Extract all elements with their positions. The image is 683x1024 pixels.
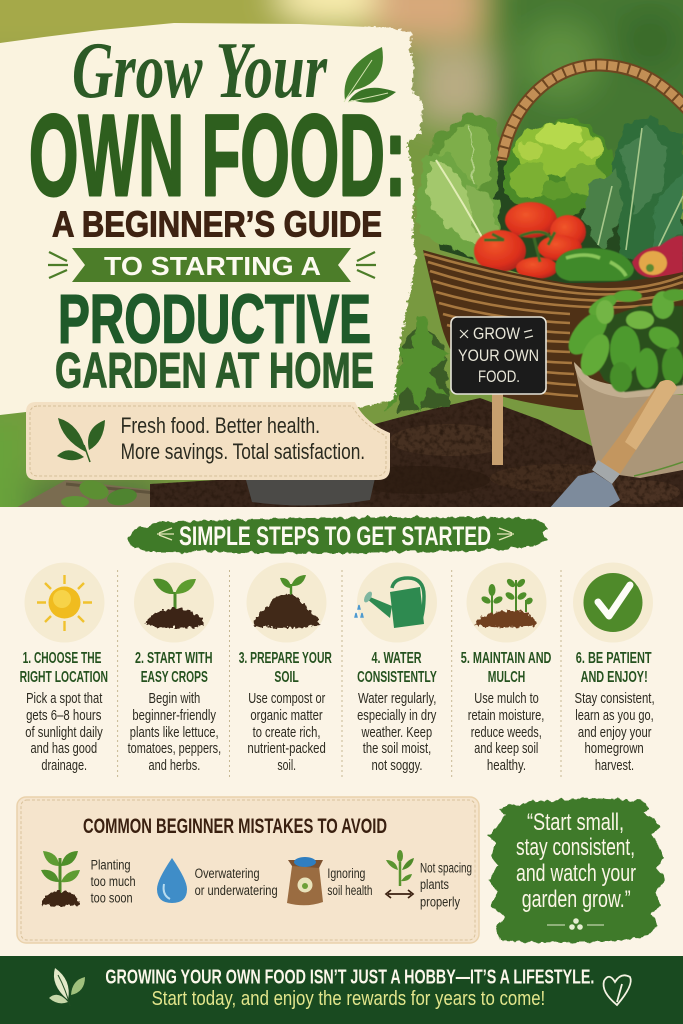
garden trowel	[548, 380, 683, 510]
icon: compost mound	[246, 562, 326, 642]
quote panel: and watch your	[516, 860, 636, 887]
quote panel: “Start small,	[527, 809, 624, 836]
step 3: prepare soil: Use compost or	[248, 691, 325, 707]
mistake: planting too much: too much	[91, 874, 136, 889]
step 1: choose location: RIGHT LOCATION	[20, 669, 108, 686]
ribbon: to starting a: TO STARTING A	[104, 251, 321, 281]
torn right edge	[330, 26, 423, 407]
mistake: ignoring soil: Ignoring	[327, 866, 365, 881]
lettuce: upper left leaf	[428, 112, 499, 200]
step 1: choose location: Pick a spot that	[26, 691, 102, 707]
step 5: maintain and mulch: and keep soil	[474, 741, 538, 757]
herb plant	[385, 318, 448, 412]
chalkboard sign	[451, 317, 546, 394]
red pepper	[632, 236, 683, 278]
title: a beginner's guide: A BEGINNER’S GUIDE	[52, 204, 382, 244]
step 5: maintain and mulch: retain moisture,	[468, 708, 544, 724]
icon: sprout	[41, 851, 80, 906]
green pepper	[555, 248, 634, 281]
icon: heart	[604, 975, 631, 1005]
step 1: choose location: and has good	[30, 741, 97, 757]
icon: watering can	[355, 562, 437, 642]
mistake: not spacing: Not spacing	[420, 861, 472, 876]
step 6: be patient: homegrown	[584, 741, 644, 757]
step 2: easy crops: plants like lettuce,	[130, 725, 219, 741]
icon: footer leaves	[49, 968, 85, 1006]
quote panel: stay consistent,	[516, 834, 635, 861]
step 4: water consistently: the soil moist,	[363, 741, 431, 757]
icon: soil bag	[287, 857, 323, 905]
step 2: easy crops: beginner-friendly	[132, 708, 217, 724]
mistake: overwatering	[195, 866, 278, 898]
step 3: prepare soil: nutrient-packed	[247, 741, 326, 757]
callout: benefits: Fresh food. Better health.	[121, 413, 320, 438]
step 4: water consistently: not soggy.	[372, 758, 422, 774]
cream torn title panel	[0, 23, 423, 415]
step 6: be patient: learn as you go,	[575, 708, 654, 724]
dark planter rim	[246, 480, 374, 506]
icon: water drop	[157, 858, 187, 903]
icon: plant spacing	[386, 850, 414, 898]
callout: benefits: More savings. Total satisfaction.	[121, 439, 365, 464]
step 5: maintain and mulch	[461, 562, 551, 774]
step 6: be patient: 6. BE PATIENT	[576, 650, 652, 667]
step 3: prepare soil: organic matter	[250, 708, 323, 724]
chalkboard sign: FOOD.	[478, 367, 520, 386]
icon: callout leaves	[57, 418, 105, 462]
panel: common mistakes	[17, 797, 479, 943]
tomatoes	[474, 202, 586, 279]
step 4: water consistently: 4. WATER	[372, 650, 422, 667]
step 1: choose location: gets 6–8 hours	[26, 708, 101, 724]
step 1: choose location: of sunlight daily	[25, 725, 103, 741]
mistake: not spacing: properly	[420, 895, 460, 910]
step 2: easy crops: and herbs.	[148, 758, 200, 774]
icon: title leaves	[344, 47, 396, 103]
ornament	[547, 918, 604, 930]
ribbon: to starting a	[48, 248, 376, 282]
step 3: prepare soil: soil.	[277, 758, 296, 774]
icon: check badge	[573, 562, 653, 642]
mistake: ignoring soil: soil health	[327, 883, 372, 898]
step 2: easy crops: 2. START WITH	[135, 650, 212, 667]
mistakes heading: COMMON BEGINNER MISTAKES TO AVOID	[83, 815, 387, 838]
step 6: be patient: Stay consistent,	[574, 691, 655, 707]
step 5: maintain and mulch: MULCH	[488, 669, 525, 686]
mistake: ignoring soil	[327, 866, 372, 898]
icon: mulched seedlings	[466, 562, 546, 642]
quote panel: garden grow.”	[522, 886, 631, 913]
kale veins	[598, 128, 683, 252]
hero photo: garden scene	[0, 0, 683, 560]
basil plant	[561, 289, 683, 392]
step 4: water consistently: especially in dry	[357, 708, 437, 724]
mistake: overwatering: Overwatering	[195, 866, 260, 881]
terracotta pot	[574, 362, 683, 478]
step 3: prepare soil: 3. PREPARE YOUR	[239, 650, 332, 667]
section banner: simple steps: SIMPLE STEPS TO GET STARTED	[179, 521, 491, 551]
step 2: easy crops: tomatoes, peppers,	[128, 741, 221, 757]
quote panel	[488, 798, 666, 943]
step 6: be patient: harvest.	[595, 758, 634, 774]
mistake: not spacing: plants	[420, 877, 449, 892]
step 5: maintain and mulch: healthy.	[487, 758, 526, 774]
wooden stake	[492, 393, 503, 465]
step 6: be patient: AND ENJOY!	[581, 669, 648, 686]
step 4: water consistently: Water regularly,	[358, 691, 436, 707]
section banner: simple steps	[127, 517, 548, 553]
title: productive: PRODUCTIVE	[58, 280, 371, 358]
step 4: water consistently: CONSISTENTLY	[357, 669, 437, 686]
step 5: maintain and mulch: reduce weeds,	[471, 725, 542, 741]
step 2: easy crops: EASY CROPS	[141, 669, 208, 686]
soil mound	[150, 398, 683, 510]
step 4: water consistently: weather. Keep	[361, 725, 432, 741]
step 6: be patient: and enjoy your	[578, 725, 652, 741]
mistake: overwatering: or underwatering	[195, 883, 278, 898]
title: Grow Your: Grow Your	[72, 27, 328, 115]
mistake: planting too much	[91, 857, 136, 906]
step 4: water consistently	[355, 562, 437, 774]
title: garden at home: GARDEN AT HOME	[55, 342, 374, 398]
icon: sprout in soil	[134, 562, 214, 642]
mistake: planting too much: too soon	[91, 891, 133, 906]
icon: sun	[24, 562, 104, 642]
callout: benefits	[26, 402, 390, 480]
mistake: not spacing	[420, 861, 472, 910]
romaine rib	[435, 160, 482, 238]
step 2: easy crops: Begin with	[148, 691, 200, 707]
step 1: choose location: 1. CHOOSE THE	[23, 650, 101, 667]
dark foliage behind greens	[430, 160, 683, 285]
lettuce: romaine left	[416, 155, 500, 262]
wicker basket	[423, 250, 683, 410]
footer band	[0, 956, 683, 1024]
step 3: prepare soil	[239, 562, 332, 774]
chalkboard sign: GROW	[473, 324, 520, 343]
step 3: prepare soil: SOIL	[274, 669, 299, 686]
raised bed wood	[18, 480, 150, 507]
step 3: prepare soil: to create rich,	[253, 725, 320, 741]
step 6: be patient	[573, 562, 655, 774]
mistake: planting too much: Planting	[91, 857, 131, 872]
chalkboard sign: YOUR OWN	[458, 346, 539, 365]
step 1: choose location: drainage.	[41, 758, 87, 774]
basket handle	[496, 58, 683, 162]
step 1: choose location	[20, 562, 108, 774]
footer subline: Start today, and enjoy the rewards for years to come!	[152, 988, 545, 1010]
step 5: maintain and mulch: Use mulch to	[474, 691, 539, 707]
step dividers	[118, 570, 561, 777]
lettuce: frilly centre	[505, 117, 614, 222]
blurred garden background	[0, 0, 683, 560]
kale: right side	[582, 116, 683, 262]
step 2: easy crops	[128, 562, 221, 774]
step 5: maintain and mulch: 5. MAINTAIN AND	[461, 650, 551, 667]
